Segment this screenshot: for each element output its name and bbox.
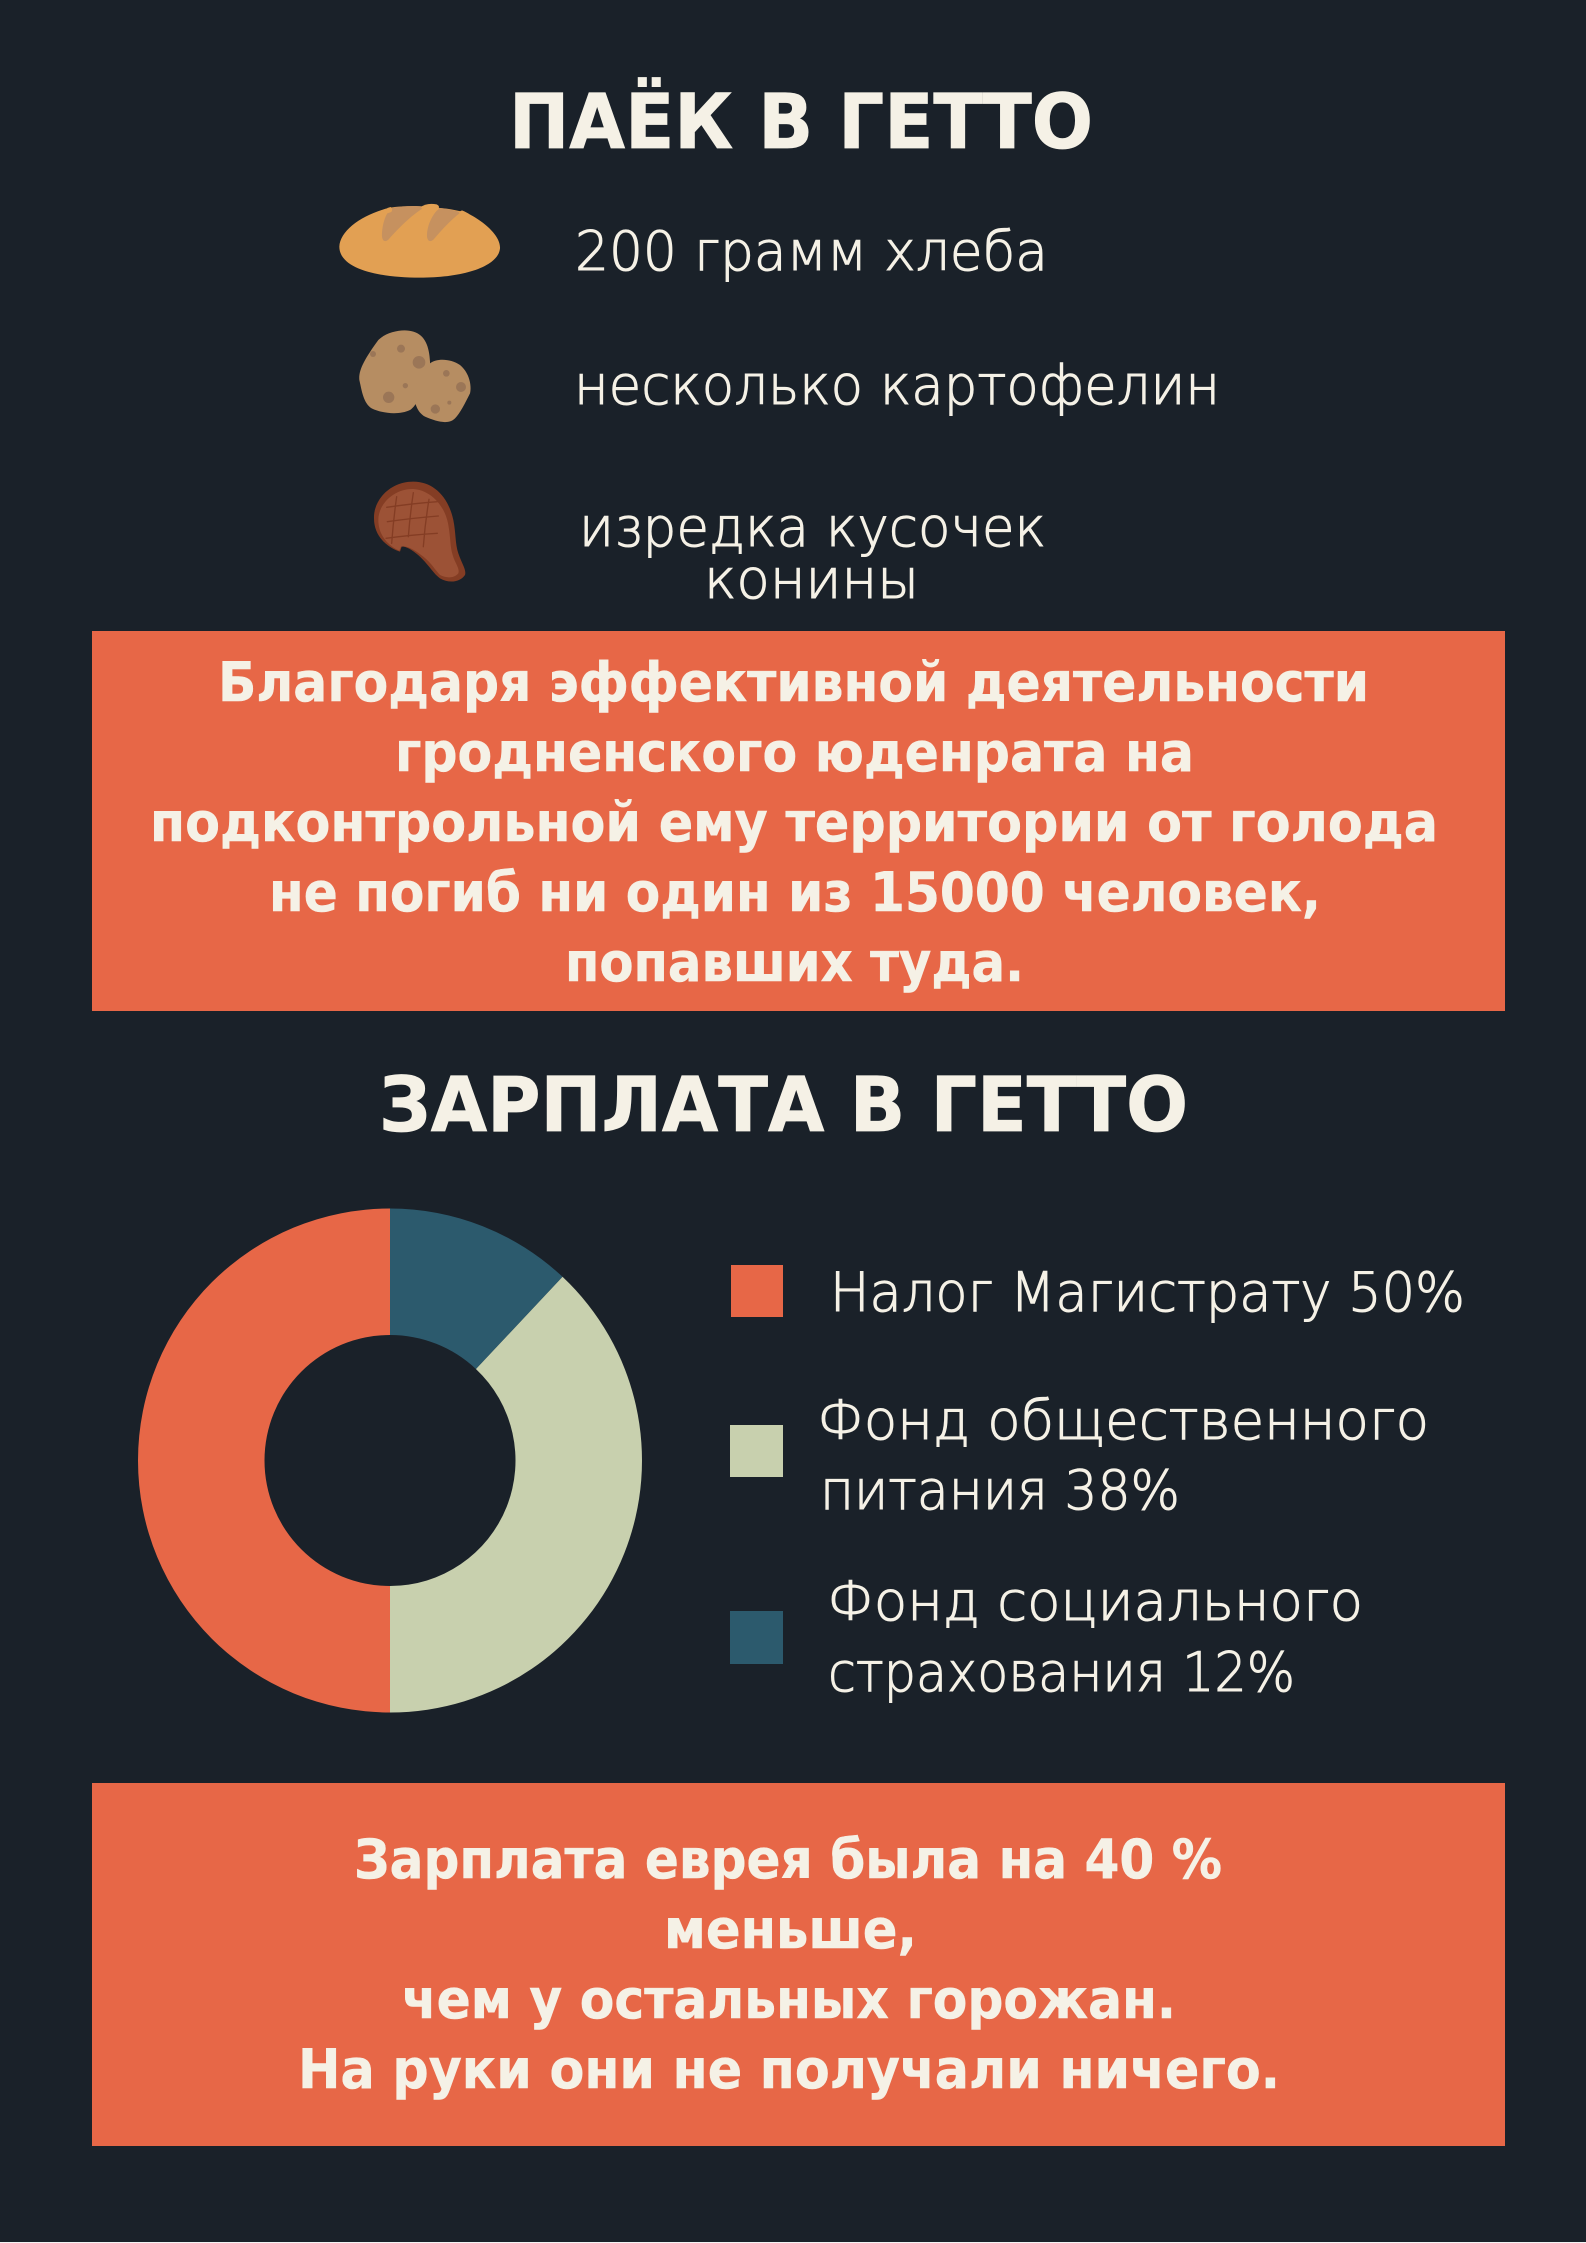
legend item: food fund: питания 38% bbox=[820, 1459, 1180, 1522]
callout: judenrat effect: не погиб ни один из 15000 человек, bbox=[269, 861, 1321, 924]
callout: judenrat effect: попавших туда. bbox=[565, 931, 1024, 994]
legend bbox=[730, 1261, 1465, 1704]
callout: salary gap: меньше, bbox=[664, 1898, 917, 1961]
donut chart: salary split bbox=[138, 1208, 642, 1712]
callout: salary gap: На руки они не получали ничего. bbox=[298, 2038, 1280, 2101]
text: occasionally a piece of horse meat bbox=[579, 496, 1046, 611]
callout: salary gap bbox=[92, 1783, 1505, 2146]
title: ration in the ghetto: ПАЁК В ГЕТТО bbox=[509, 76, 1093, 166]
callout: salary gap: чем у остальных горожан. bbox=[402, 1968, 1176, 2031]
callout: judenrat effect bbox=[92, 631, 1505, 1011]
text: occasionally a piece of horse meat: изредка кусочек bbox=[579, 496, 1046, 559]
panel: ration list bbox=[339, 204, 1220, 611]
segment: tax 50% bbox=[138, 1208, 390, 1712]
segment: social insurance 12% bbox=[390, 1208, 562, 1369]
icon: bread loaf bbox=[339, 204, 500, 278]
icon: potatoes bbox=[359, 330, 471, 422]
legend item: social insurance: страхования 12% bbox=[828, 1641, 1295, 1704]
legend item: social insurance: Фонд социального bbox=[827, 1570, 1363, 1633]
callout: judenrat effect: подконтрольной ему территории от голода bbox=[150, 791, 1438, 854]
legend item: food fund bbox=[730, 1389, 1429, 1522]
heading: salary in the ghetto: ЗАРПЛАТА В ГЕТТО bbox=[379, 1060, 1188, 1149]
legend item: social insurance bbox=[730, 1570, 1363, 1704]
text: 200 g of bread: 200 грамм хлеба bbox=[575, 220, 1048, 283]
callout: judenrat effect: гродненского юденрата на bbox=[395, 721, 1194, 784]
text: several potatoes: несколько картофелин bbox=[574, 354, 1220, 417]
callout: salary gap: Зарплата еврея была на 40 % bbox=[354, 1828, 1222, 1891]
icon: piece of horse meat bbox=[374, 482, 465, 582]
segment: food fund 38% bbox=[390, 1277, 642, 1712]
legend item: tax: Налог Магистрату 50% bbox=[830, 1261, 1465, 1324]
text: occasionally a piece of horse meat: конины bbox=[704, 548, 919, 611]
callout: judenrat effect: Благодаря эффективной деятельности bbox=[218, 651, 1369, 714]
legend item: food fund: Фонд общественного bbox=[817, 1389, 1429, 1452]
